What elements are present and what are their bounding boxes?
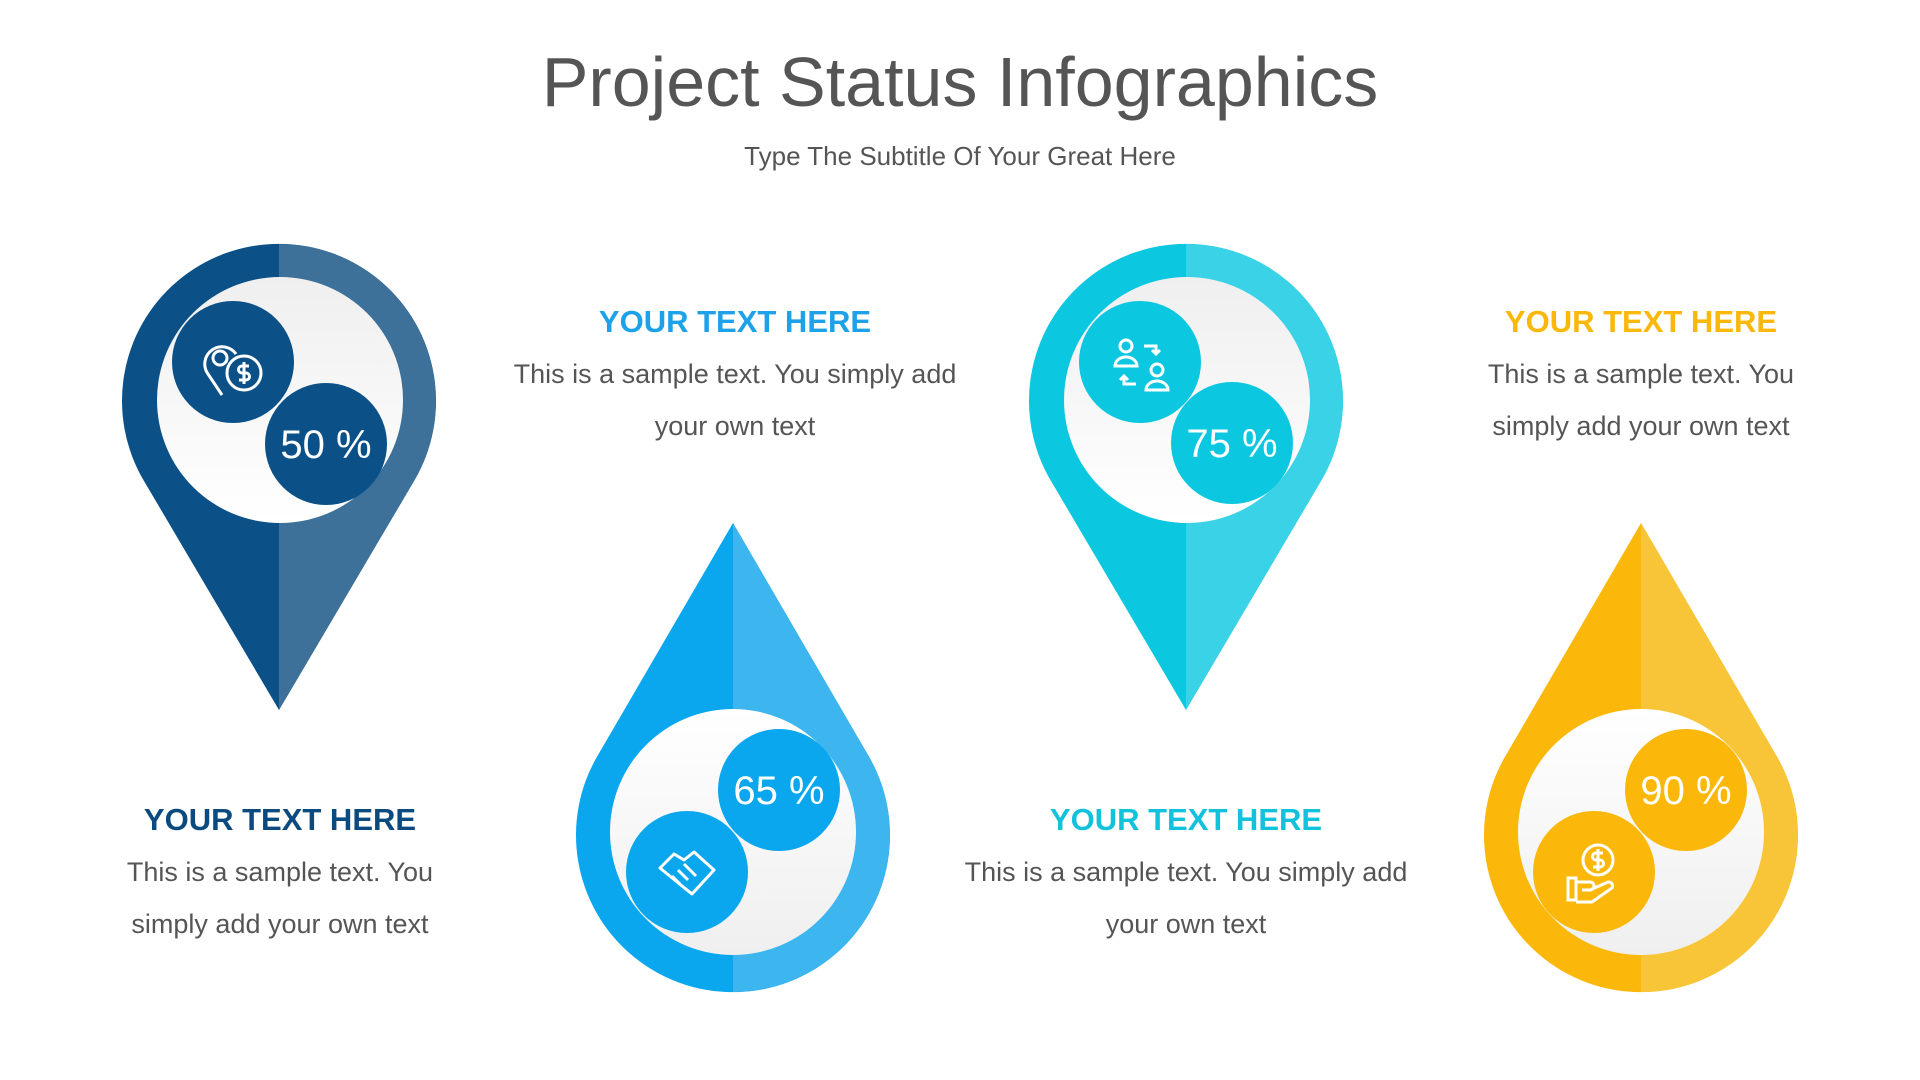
percent circle: 90%	[1625, 729, 1747, 851]
text block: top 1: your own text	[655, 411, 815, 441]
pin: 75%	[1029, 244, 1343, 710]
pin: 50%	[122, 244, 436, 710]
percent circle: 90%: 90 %	[1640, 769, 1732, 813]
text block: bottom 1: simply add your own text	[131, 909, 429, 939]
drop: 65%	[576, 523, 890, 992]
percent circle: 50%: 50 %	[280, 423, 372, 467]
text block: bottom 1: This is a sample text. You	[127, 857, 433, 887]
drop: 90%	[1484, 523, 1798, 992]
text block: bottom 2: YOUR TEXT HERE	[1050, 802, 1322, 837]
percent circle: 65%: 65 %	[733, 769, 825, 813]
text block: top 2: simply add your own text	[1492, 411, 1790, 441]
text block: top 1	[514, 304, 956, 441]
icon circle: hand with coin	[1533, 811, 1655, 933]
subtitle: Type The Subtitle Of Your Great Here	[744, 141, 1176, 171]
percent circle: 65%	[718, 729, 840, 851]
text block: top 1: YOUR TEXT HERE	[599, 304, 871, 339]
title: Project Status Infographics	[542, 43, 1378, 121]
text block: bottom 2	[965, 802, 1407, 939]
text block: top 1: This is a sample text. You simply add	[514, 359, 956, 389]
icon circle: handshake	[626, 811, 748, 933]
icon circle: people exchange	[1079, 301, 1201, 423]
percent circle: 50%	[265, 383, 387, 505]
text block: top 2: YOUR TEXT HERE	[1505, 304, 1777, 339]
text block: bottom 1: YOUR TEXT HERE	[144, 802, 416, 837]
percent circle: 75%	[1171, 382, 1293, 504]
text block: top 2: This is a sample text. You	[1488, 359, 1794, 389]
percent circle: 75%: 75 %	[1186, 422, 1278, 466]
icon circle: location money	[172, 301, 294, 423]
text block: bottom 2: your own text	[1106, 909, 1266, 939]
text block: bottom 2: This is a sample text. You simply add	[965, 857, 1407, 887]
text block: top 2	[1488, 304, 1794, 441]
text block: bottom 1	[127, 802, 433, 939]
